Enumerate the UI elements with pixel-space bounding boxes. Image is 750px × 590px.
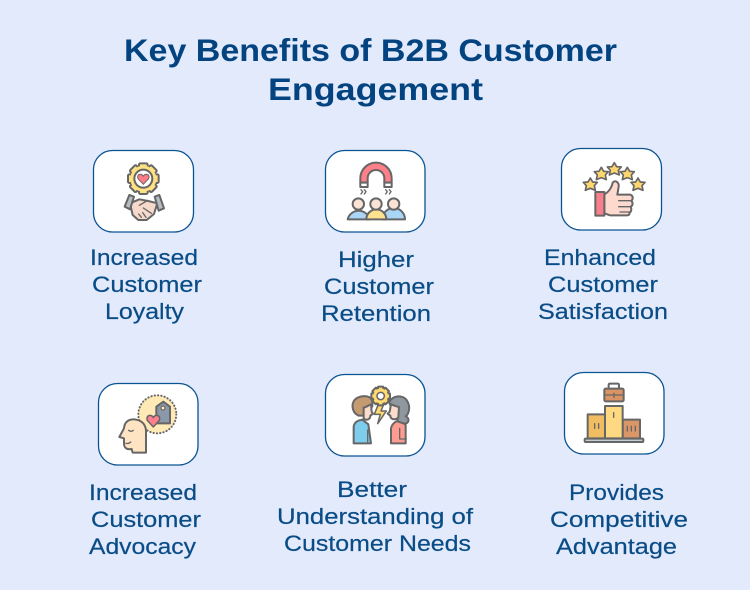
panel: enhanced customer satisfaction — [538, 148, 668, 324]
label — [538, 245, 668, 324]
icon card: head with heart and tag — [98, 384, 198, 465]
title — [124, 32, 617, 107]
label: Loyalty — [105, 299, 185, 324]
label: Increased — [89, 480, 197, 505]
label — [90, 245, 203, 324]
label: Advantage — [556, 534, 677, 559]
icon card: podium with briefcase — [564, 372, 664, 454]
label: Customer — [548, 272, 659, 297]
title: Engagement — [268, 71, 484, 107]
label: Increased — [90, 245, 198, 270]
panel: increased customer advocacy — [89, 384, 202, 559]
label — [321, 247, 435, 326]
label: Better — [337, 477, 408, 502]
panel: increased customer loyalty — [90, 150, 203, 324]
label — [550, 480, 688, 559]
panel: better understanding of customer needs — [277, 374, 474, 556]
label: Customer — [324, 274, 435, 299]
icon card: magnet and people — [326, 150, 425, 232]
icon card: two people with gear and bolt — [326, 374, 425, 456]
label: Customer Needs — [284, 531, 471, 556]
title: Key Benefits of B2B Customer — [124, 32, 617, 68]
label: Customer — [91, 507, 202, 532]
label — [89, 480, 202, 559]
panel: higher customer retention — [321, 150, 435, 326]
icon card: handshake and gear — [94, 150, 194, 232]
label: Competitive — [550, 507, 688, 532]
label: Advocacy — [89, 534, 197, 559]
icon card: thumbs up and stars — [562, 148, 662, 230]
label: Provides — [569, 480, 664, 505]
label: Understanding of — [277, 504, 474, 529]
label: Customer — [92, 272, 203, 297]
panel: provides competitive advantage — [550, 372, 688, 559]
label: Satisfaction — [538, 299, 668, 324]
label: Enhanced — [544, 245, 656, 270]
label: Higher — [338, 247, 415, 272]
label — [277, 477, 474, 556]
label: Retention — [321, 301, 431, 326]
